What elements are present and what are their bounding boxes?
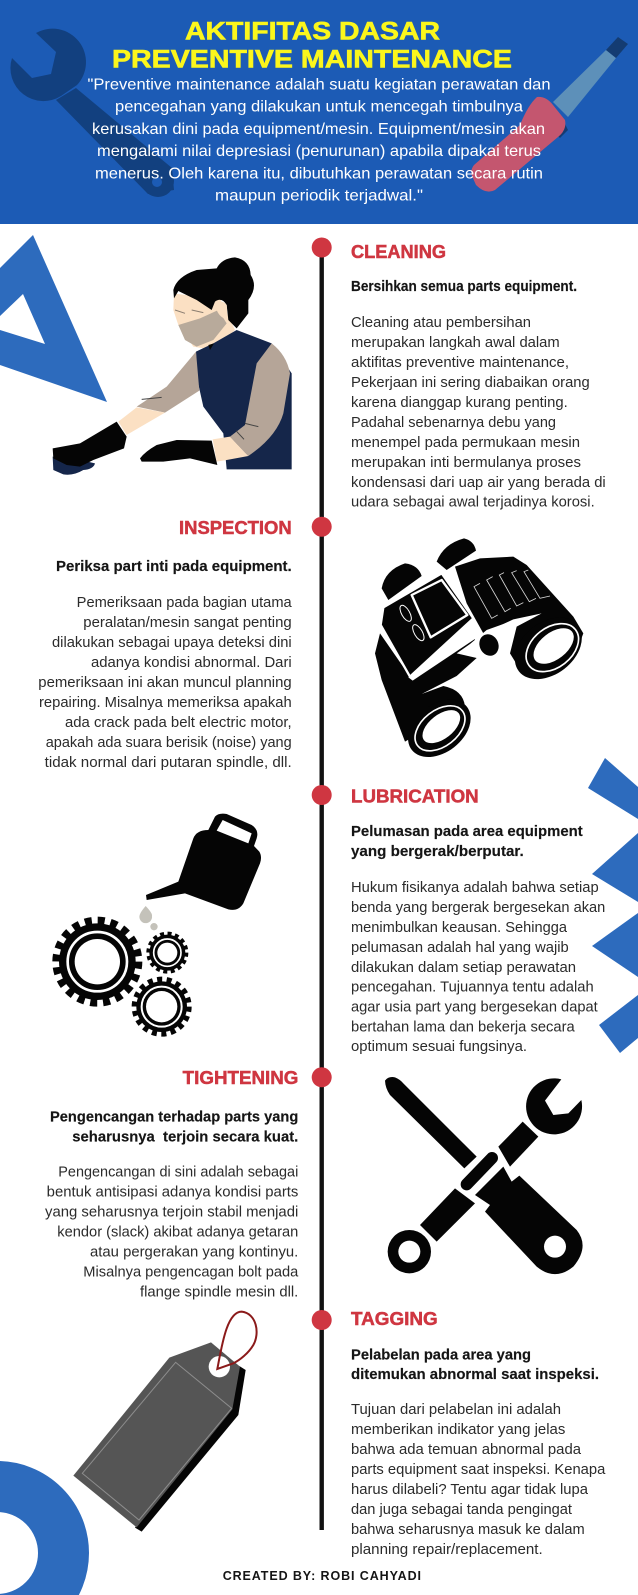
body text: tightening: yang seharusnya terjoin stabil menjadi — [45, 1205, 298, 1221]
body text: lubrication: optimum sesuai fungsinya. — [351, 1039, 527, 1055]
body text: inspection: ada crack pada belt electric motor, — [65, 715, 292, 731]
subheading: lubrication — [351, 824, 583, 860]
subheading: tightening — [50, 1110, 298, 1146]
body text: lubrication: pencegahan. Tujuannya tentu adalah — [351, 980, 594, 996]
illustration: crossed screwdriver and wrench — [385, 1077, 583, 1274]
subheading: lubrication: yang bergerak/berputar. — [351, 844, 524, 860]
timeline — [312, 238, 332, 1530]
body text: cleaning: udara sebagai awal terjadinya korosi. — [351, 494, 595, 510]
intro quote: menerus. Oleh karena itu, dibutuhkan perawatan secara rutin — [95, 165, 543, 182]
body text: lubrication: menimbulkan keausan. Sehingga — [351, 920, 568, 936]
body text: cleaning: merupakan inti bermulanya proses — [351, 455, 581, 471]
body text: lubrication: pelumasan adalah hal yang wajib — [351, 940, 569, 956]
subheading: cleaning: Bersihkan semua parts equipment. — [351, 279, 577, 295]
body text: lubrication: dilakukan dalam setiap perawatan — [351, 960, 576, 976]
decoration: blue ring bottom left — [0, 1486, 64, 1595]
timeline dot: tagging — [312, 1310, 332, 1330]
body text: cleaning: menempel pada permukaan mesin — [351, 435, 580, 451]
body text: cleaning — [351, 315, 606, 510]
body text: cleaning: Padahal sebenarnya debu yang — [351, 415, 556, 431]
intro quote: pencegahan yang dilakukan untuk mencegah timbulnya — [115, 99, 523, 116]
subheading: inspection: Periksa part inti pada equipment. — [56, 559, 292, 575]
body text: cleaning: aktifitas preventive maintenance, — [351, 355, 569, 371]
timeline dot: cleaning — [312, 238, 332, 258]
body text: inspection: adanya kondisi abnormal. Dari — [91, 655, 292, 671]
body text: tightening: kendor (slack) akibat adanya getaran — [57, 1225, 298, 1241]
timeline dot: inspection — [312, 517, 332, 537]
body text: tightening: Pengencangan di sini adalah sebagai — [58, 1165, 298, 1181]
illustration: masked worker cleaning — [53, 257, 292, 475]
body text: tightening: bentuk antisipasi adanya kondisi parts — [47, 1185, 298, 1201]
body text: cleaning: Pekerjaan ini sering diabaikan orang — [351, 375, 590, 391]
body text: inspection: Pemeriksaan pada bagian utama — [77, 595, 293, 611]
timeline dot: lubrication — [312, 785, 332, 805]
body text: cleaning: karena dianggap kurang penting. — [351, 395, 568, 411]
body text: lubrication: benda yang bergerak bergesekan akan — [351, 900, 605, 916]
body text: tagging: Tujuan dari pelabelan ini adalah — [351, 1402, 561, 1418]
icon: wrench — [10, 29, 174, 197]
title: PREVENTIVE MAINTENANCE — [112, 46, 512, 74]
subheading: tagging: Pelabelan pada area yang — [351, 1347, 531, 1363]
subheading: tagging — [351, 1347, 599, 1383]
body text: tightening: Misalnya pengencagan bolt pada — [83, 1265, 299, 1281]
illustration: hanging tag — [73, 1312, 257, 1532]
timeline dot: tightening — [312, 1067, 332, 1087]
body text: inspection — [38, 595, 293, 771]
intro quote: mengalami nilai depresiasi (penurunan) apabila dipakai terus — [97, 143, 541, 160]
body text: tagging: memberikan indikator yang jelas — [351, 1422, 565, 1438]
body text: tagging: bahwa seharusnya masuk ke dalam — [351, 1522, 585, 1538]
panel: inspection — [38, 518, 293, 771]
title: AKTIFITAS DASAR — [185, 18, 440, 46]
body text: inspection: dilakukan sebagai upaya deteksi dini — [52, 635, 292, 651]
title — [112, 18, 512, 74]
body text: inspection: pemeriksaan ini akan muncul planning — [38, 675, 292, 691]
body text: lubrication: Hukum fisikanya adalah bahwa setiap — [351, 880, 599, 896]
body text: tagging: harus dilabeli? Tentu agar tidak lupa — [351, 1482, 589, 1498]
body text: inspection: peralatan/mesin sangat penting — [83, 615, 292, 631]
body text: tagging — [351, 1402, 606, 1558]
panel: tightening — [45, 1068, 299, 1301]
body text: tagging: planning repair/replacement. — [351, 1542, 543, 1558]
intro quote: kerusakan dini pada equipment/mesin. Equipment/mesin akan — [92, 121, 545, 138]
subheading: tightening: Pengencangan terhadap parts yang — [50, 1110, 298, 1126]
body text: lubrication — [351, 880, 605, 1055]
panel: lubrication — [351, 787, 605, 1055]
heading: inspection: INSPECTION — [179, 518, 292, 538]
subheading: tightening: seharusnya terjoin secara kuat. — [72, 1130, 298, 1146]
body text: tagging: bahwa ada temuan abnormal pada — [351, 1442, 582, 1458]
panel: tagging — [351, 1309, 606, 1558]
footer credit: CREATED BY: ROBI CAHYADI — [223, 1569, 421, 1583]
heading: tagging: TAGGING — [351, 1309, 438, 1329]
subheading: tagging: ditemukan abnormal saat inspeksi. — [351, 1367, 599, 1383]
icon: screwdriver — [471, 37, 628, 192]
intro quote — [88, 76, 550, 205]
body text: tagging: parts equipment saat inspeksi. Kenapa — [351, 1462, 606, 1478]
body text: inspection: tidak normal dari putaran spindle, dll. — [45, 755, 292, 771]
body text: inspection: repairing. Misalnya memeriksa apakah — [39, 695, 292, 711]
panel: cleaning — [351, 242, 606, 510]
heading: lubrication: LUBRICATION — [351, 787, 479, 807]
subheading: lubrication: Pelumasan pada area equipment — [351, 824, 583, 840]
illustration: oil can and gears — [56, 814, 261, 1034]
illustration: binoculars — [375, 538, 594, 769]
body text: cleaning: kondensasi dari uap air yang berada di — [351, 475, 606, 491]
heading: cleaning: CLEANING — [351, 242, 446, 262]
body text: tagging: dan juga sebagai tanda pengingat — [351, 1502, 572, 1518]
body text: lubrication: bertahan lama dan bekerja secara — [351, 1020, 576, 1036]
decoration: blue triangles on right edge — [588, 758, 638, 1053]
body text: cleaning: merupakan langkah awal dalam — [351, 335, 560, 351]
intro quote: "Preventive maintenance adalah suatu kegiatan perawatan dan — [88, 76, 550, 94]
body text: tightening — [45, 1165, 299, 1301]
decoration: blue set-square triangle — [0, 235, 107, 402]
panel: header banner — [0, 0, 638, 224]
body text: tightening: atau pergerakan yang kontinyu. — [90, 1245, 298, 1261]
body text: cleaning: Cleaning atau pembersihan — [351, 315, 531, 331]
intro quote: maupun periodik terjadwal." — [215, 188, 423, 205]
body text: lubrication: agar usia part yang bergesekan dapat — [351, 1000, 598, 1016]
heading: tightening: TIGHTENING — [183, 1068, 298, 1088]
body text: inspection: apakah ada suara berisik (noise) yang — [46, 735, 292, 751]
body text: tightening: flange spindle mesin dll. — [140, 1285, 298, 1301]
